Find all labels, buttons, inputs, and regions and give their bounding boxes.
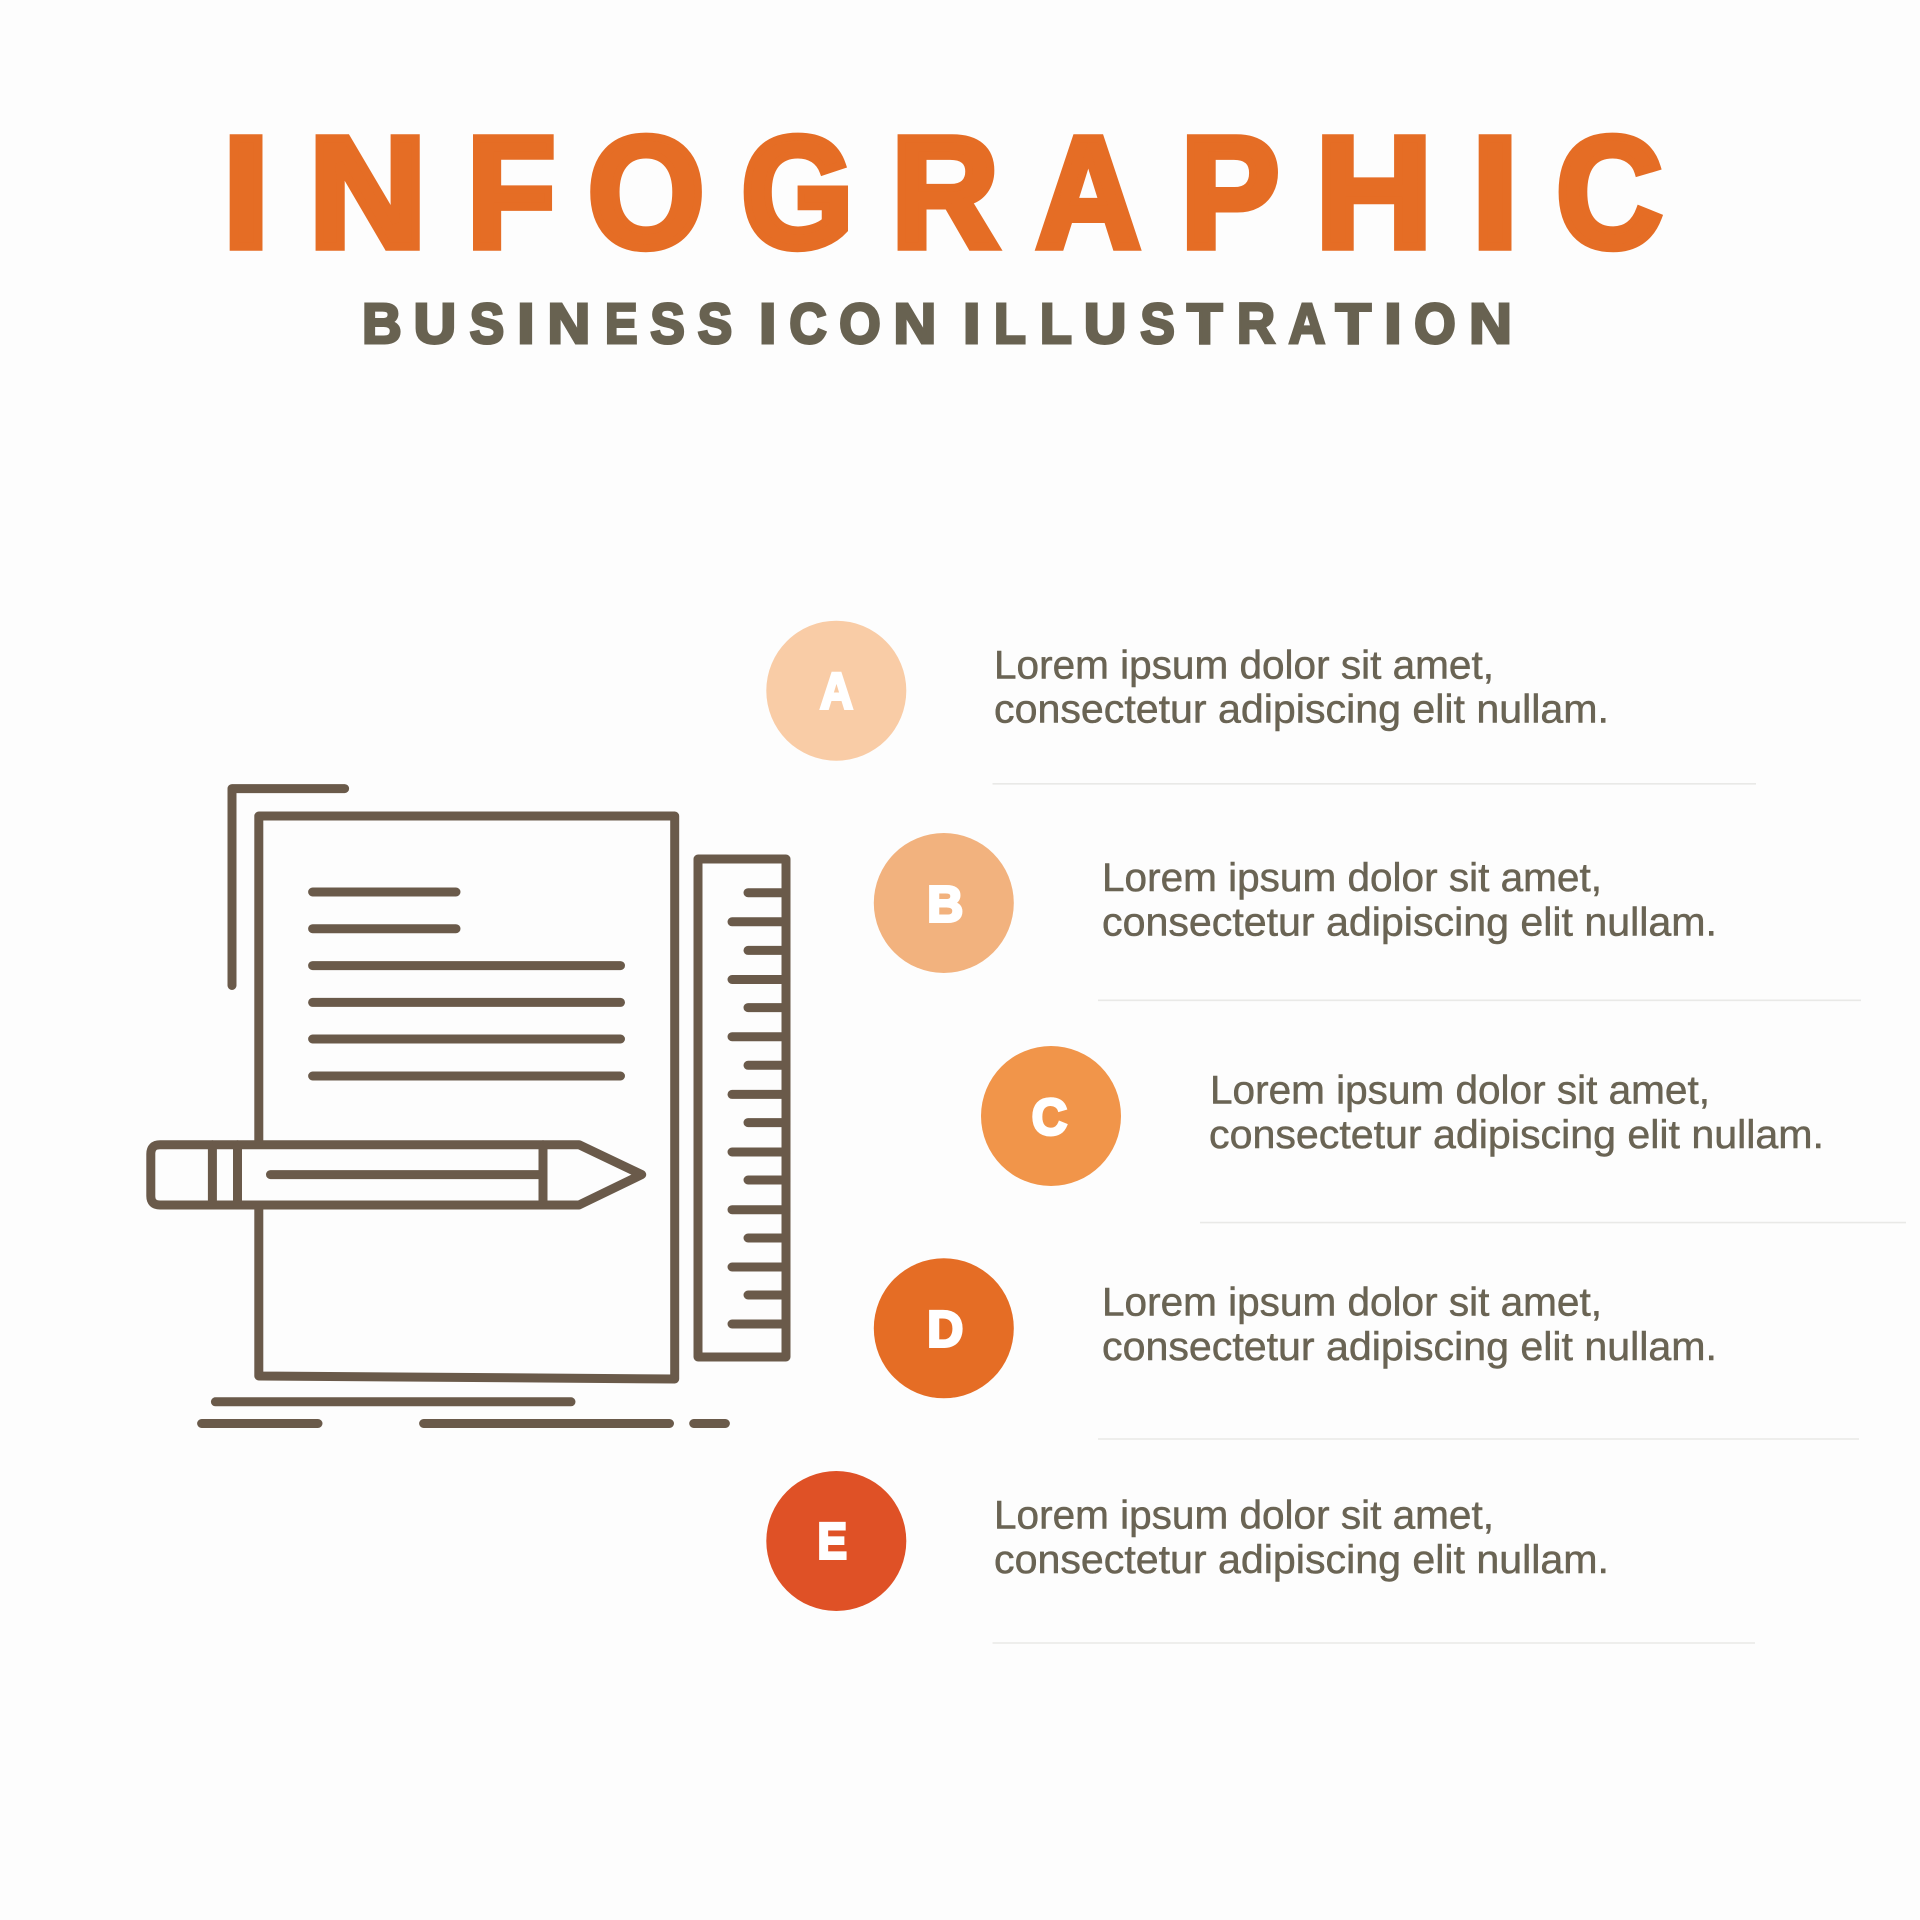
text D: Lorem ipsum dolor sit amet, (1102, 1281, 1602, 1325)
document text lines (313, 892, 620, 1076)
text C: consectetur adipiscing elit nullam. (1209, 1113, 1824, 1157)
item A (766, 621, 1756, 784)
subtitle: I (517, 292, 535, 355)
text E: Lorem ipsum dolor sit amet, (994, 1494, 1494, 1538)
subtitle: L (994, 292, 1026, 355)
subtitle: E (605, 292, 638, 355)
text D: consectetur adipiscing elit nullam. (1102, 1325, 1717, 1369)
badge C (981, 1046, 1121, 1186)
title: I (1472, 105, 1518, 281)
title: G (741, 105, 853, 281)
title: I (223, 105, 270, 281)
title: N (309, 105, 427, 281)
badge A (766, 621, 906, 761)
subtitle: I (759, 292, 776, 355)
icon: document with pencil and ruler (151, 789, 786, 1424)
subtitle: S (470, 292, 504, 355)
badge E (766, 1471, 906, 1611)
title: F (467, 105, 555, 281)
badge D: D (927, 1300, 963, 1357)
subtitle: R (1237, 292, 1275, 355)
text B: Lorem ipsum dolor sit amet, (1102, 856, 1602, 900)
subtitle: N (894, 292, 936, 355)
subtitle: S (698, 292, 732, 355)
text A: consectetur adipiscing elit nullam. (994, 688, 1609, 732)
subtitle: C (789, 292, 827, 355)
text E: consectetur adipiscing elit nullam. (994, 1538, 1609, 1582)
item C (981, 1046, 1906, 1223)
text B: consectetur adipiscing elit nullam. (1102, 900, 1717, 944)
subtitle: A (1289, 292, 1325, 355)
badge A: A (820, 662, 853, 720)
title: O (588, 105, 704, 281)
subtitle: O (1414, 292, 1456, 355)
text C: Lorem ipsum dolor sit amet, (1210, 1069, 1710, 1113)
subtitle: B (362, 292, 402, 355)
badge B: B (927, 876, 963, 932)
subtitle: N (548, 292, 590, 355)
title: R (891, 105, 999, 281)
subtitle: L (1040, 292, 1072, 355)
ruler (698, 859, 786, 1357)
item B (874, 833, 1861, 1000)
subtitle: S (650, 292, 685, 355)
title: A (1036, 105, 1140, 281)
item E (766, 1471, 1755, 1643)
subtitle: U (414, 292, 456, 355)
document sheet (259, 816, 675, 1379)
item D (874, 1258, 1859, 1439)
subtitle: O (839, 292, 881, 355)
badge C: C (1032, 1088, 1067, 1146)
badge D (874, 1258, 1014, 1398)
title: H (1315, 105, 1432, 281)
title: C (1556, 105, 1662, 281)
subtitle: T (1336, 292, 1371, 355)
subtitle: S (1140, 292, 1175, 355)
subtitle: I (1384, 292, 1402, 355)
subtitle: T (1187, 292, 1222, 355)
subtitle: I (963, 292, 980, 355)
badge B (874, 833, 1014, 973)
title: P (1181, 105, 1279, 281)
text A: Lorem ipsum dolor sit amet, (994, 643, 1494, 687)
ground lines (202, 1402, 725, 1424)
subtitle: N (1469, 292, 1512, 355)
badge E: E (818, 1512, 847, 1570)
pencil (151, 1145, 642, 1205)
corner bracket behind document (232, 789, 345, 986)
subtitle: U (1084, 292, 1126, 355)
